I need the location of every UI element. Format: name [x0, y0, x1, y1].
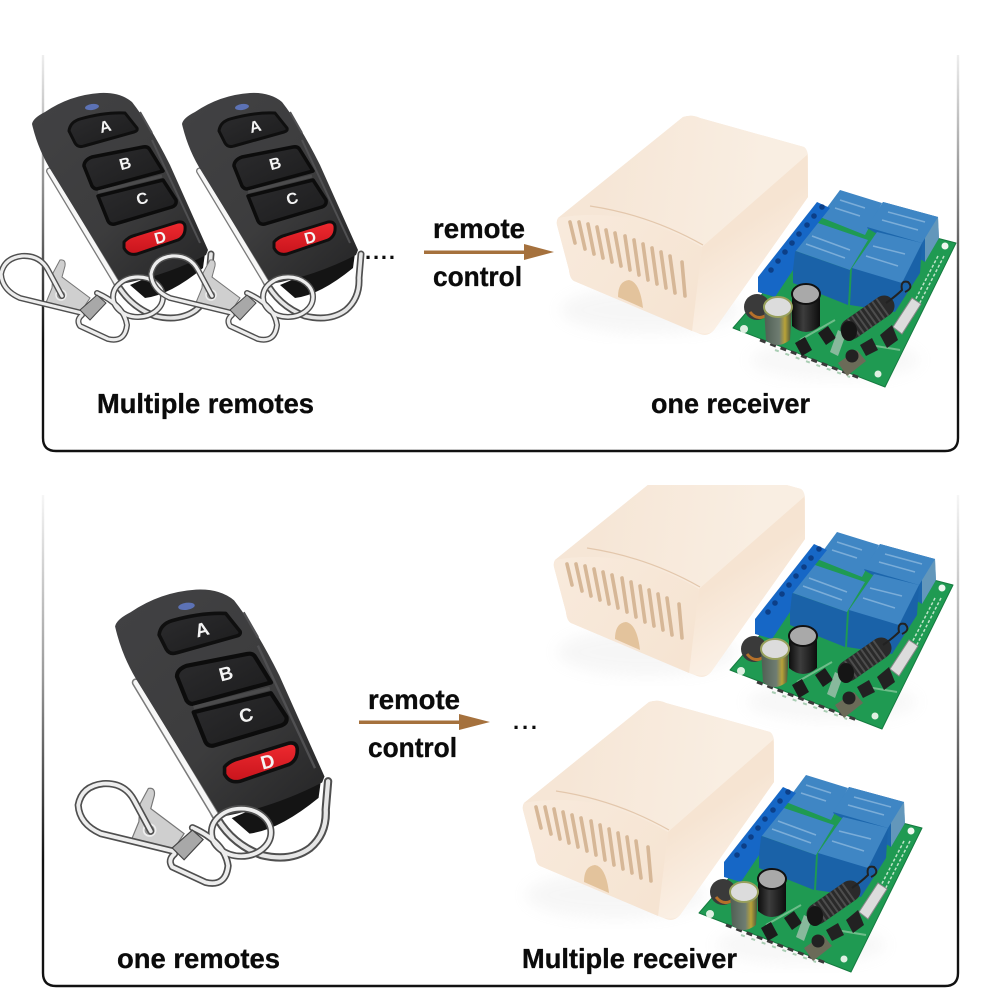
remote 1: B [118, 155, 133, 174]
remote 3: A [193, 619, 212, 642]
remote 3: C [237, 704, 256, 728]
panel: one remote to multiple receivers [43, 458, 958, 986]
remote 2: B [268, 155, 283, 174]
remote 2 [151, 93, 361, 340]
caption: one remotes: one remotes [117, 943, 280, 974]
caption: one receiver: one receiver [651, 388, 810, 419]
remote 3: B [217, 663, 236, 686]
receiver 1 [554, 458, 953, 729]
remote 3 [78, 590, 328, 883]
arrow label: remote: remote [368, 684, 460, 715]
remote 2: A [248, 118, 264, 137]
ellipsis dots: .... [365, 239, 395, 264]
receiver [557, 116, 956, 387]
remote 1: C [135, 190, 151, 209]
remote 3: D [258, 751, 277, 775]
receiver 2 [523, 701, 922, 972]
remote 1 [1, 93, 211, 340]
remote 1: A [98, 118, 114, 137]
arrow [359, 714, 490, 730]
remote 2: D [303, 229, 318, 248]
ellipsis dots: ... [513, 709, 537, 734]
panel: multiple remotes to one receiver [1, 55, 958, 451]
caption: multiple receiver: Multiple receiver [522, 943, 737, 974]
caption: multiple remotes: Multiple remotes [97, 388, 314, 419]
arrow [424, 244, 554, 260]
arrow label: control: control [433, 261, 522, 292]
arrow label: control: control [368, 732, 457, 763]
arrow label: remote: remote [433, 213, 525, 244]
remote 1: D [153, 229, 168, 248]
remote 2: C [285, 190, 301, 209]
